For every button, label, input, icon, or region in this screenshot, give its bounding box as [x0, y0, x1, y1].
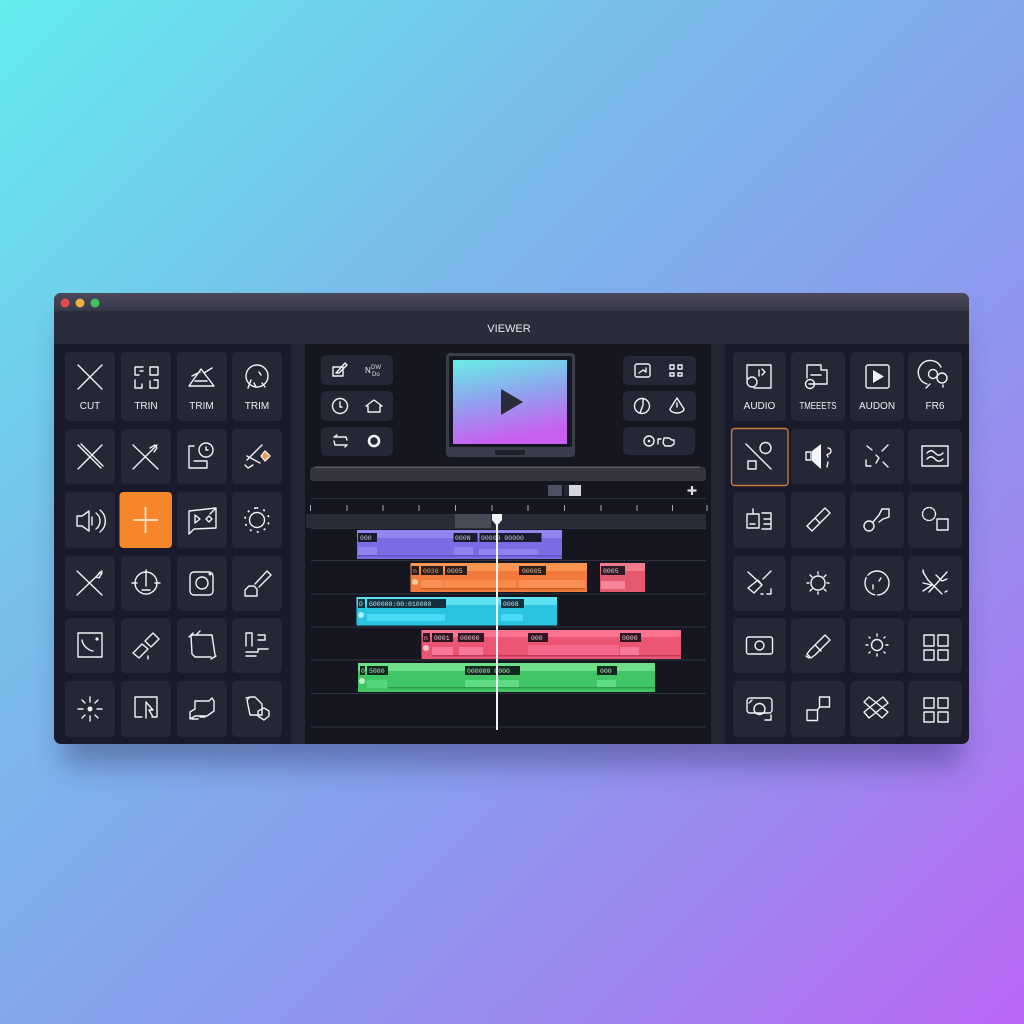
- tool: double cut: [65, 429, 115, 484]
- window shadow: [62, 320, 962, 765]
- tool: tweets: TMEEETS: [800, 401, 837, 412]
- timeline toolbar: [310, 466, 706, 496]
- tool: trim dial: TRIM: [245, 401, 269, 412]
- button group: right bottom: [623, 427, 695, 455]
- tool: audio: AUDIO: [744, 401, 776, 412]
- monitor with play preview: [446, 353, 575, 457]
- panel: viewer and controls: [306, 353, 707, 730]
- button group: right top: [623, 356, 696, 385]
- viewer header: VIEWER: [487, 323, 531, 335]
- tool: crossing arrows: [908, 556, 962, 611]
- tool: volume: [65, 492, 115, 548]
- tool: sun: [791, 556, 845, 611]
- title bar: [54, 293, 969, 311]
- tool: crop rotate: [177, 618, 227, 673]
- clip: purple: 00000 00000: [481, 535, 524, 542]
- clip: rose: 0000: [622, 635, 638, 642]
- tool: trim dial: [232, 352, 282, 421]
- tool: cut: [65, 352, 115, 421]
- clip: rose: 000: [531, 635, 543, 642]
- tool: add, active orange: [120, 492, 172, 548]
- center panel background: [305, 344, 711, 744]
- tool: tweets: [791, 352, 845, 421]
- tool: tools cross: [733, 556, 786, 611]
- tool: audon play: [850, 352, 904, 421]
- tool: cut: CUT: [80, 401, 100, 412]
- tool: marker: [791, 492, 845, 548]
- clip: purple: 000: [360, 535, 372, 542]
- tool: tape: [121, 618, 171, 673]
- panel: right tools: [732, 352, 962, 737]
- clip: orange: 00005: [522, 568, 542, 575]
- tool: fr6: [908, 352, 962, 421]
- tool: crosshair: [121, 556, 171, 611]
- tool: speaker: [791, 429, 845, 484]
- tool: two squares: [791, 681, 845, 737]
- tool: rotate camera: [733, 681, 786, 737]
- tool: target: [65, 681, 115, 737]
- tool: marker tip: [791, 618, 845, 673]
- icon: play: [501, 389, 523, 415]
- clip: green: [358, 663, 655, 692]
- tool: audio: [733, 352, 786, 421]
- clip: rose: 00000: [460, 635, 480, 642]
- clip: small pink: [600, 563, 645, 592]
- tool: selected shape slash: [732, 428, 788, 486]
- tool: clip corner: [65, 618, 115, 673]
- tool: link nodes: [850, 492, 904, 548]
- tool: brightness: [232, 492, 282, 548]
- tool: chat: [177, 492, 227, 548]
- tool: camera frame: [733, 618, 786, 673]
- scrub bar: [306, 514, 706, 528]
- panel: left tools: [65, 352, 282, 737]
- playhead: [492, 514, 502, 730]
- tool: grid bottom: [908, 681, 962, 737]
- tool: select cursor: [121, 681, 171, 737]
- tool: trim mountain: TRIM: [189, 401, 214, 412]
- clip: rose: [422, 630, 681, 659]
- tool: burst arrows: [850, 429, 904, 484]
- tool: trim mountain: [177, 352, 227, 421]
- tool: grid: [908, 618, 962, 673]
- tool: trin: [121, 352, 171, 421]
- button group: left top: N: [365, 366, 371, 375]
- tool: camera: [177, 556, 227, 611]
- button group: left top: DW: [371, 365, 381, 371]
- clip: cyan: G00000:00:010000: [369, 601, 432, 608]
- application window: [54, 293, 969, 744]
- viewer header: [54, 311, 969, 344]
- tool: brush: [232, 556, 282, 611]
- clip: green: 000: [600, 668, 612, 675]
- button group: left middle: [321, 391, 393, 421]
- clip: cyan: D: [359, 601, 363, 608]
- clip: green: 0: [361, 668, 365, 675]
- clip: small pink: 0005: [603, 568, 619, 575]
- clip: purple: [357, 530, 562, 559]
- clip: orange: 0036: [423, 568, 439, 575]
- button group: right middle: [623, 391, 696, 421]
- tool: layout: [232, 618, 282, 673]
- panel dividers: [291, 344, 725, 744]
- tool: cut brush: [121, 429, 171, 484]
- button group: left bottom: [321, 427, 393, 456]
- clip: green: 5000: [369, 668, 385, 675]
- clip: cyan: 0008: [503, 601, 519, 608]
- clip: orange: n: [413, 568, 417, 575]
- clip: green: 000000 0000: [467, 668, 510, 675]
- tool: shapes: [232, 681, 282, 737]
- tool: trin: TRIN: [134, 401, 158, 412]
- tool: clip timer: [177, 429, 227, 484]
- tool: swap: [177, 681, 227, 737]
- clip: orange: [410, 563, 587, 592]
- tool: wave frame: [908, 429, 962, 484]
- clip: cyan: [356, 597, 557, 626]
- tool: fr6: FR6: [926, 401, 945, 412]
- tool: dashed dial: [850, 556, 904, 611]
- track lines: [311, 528, 706, 727]
- tool: globe square: [908, 492, 962, 548]
- clip: purple: 000N: [455, 535, 471, 542]
- tool: scissors with orange marker: [232, 429, 282, 484]
- clip: orange: 0005: [447, 568, 463, 575]
- button group: left top: [321, 355, 393, 385]
- clip: rose: n: [424, 635, 428, 642]
- timeline ruler: [310, 498, 707, 511]
- button group: left top: Do: [372, 372, 380, 378]
- tool: audon play: AUDON: [859, 401, 895, 412]
- tool: tag box: [733, 492, 786, 548]
- clip: rose: 0001: [434, 635, 450, 642]
- icon: plus: [688, 486, 696, 495]
- tool: cut feather: [65, 556, 115, 611]
- tool: sun light: [850, 618, 904, 673]
- tool: crossed bands: [850, 681, 904, 737]
